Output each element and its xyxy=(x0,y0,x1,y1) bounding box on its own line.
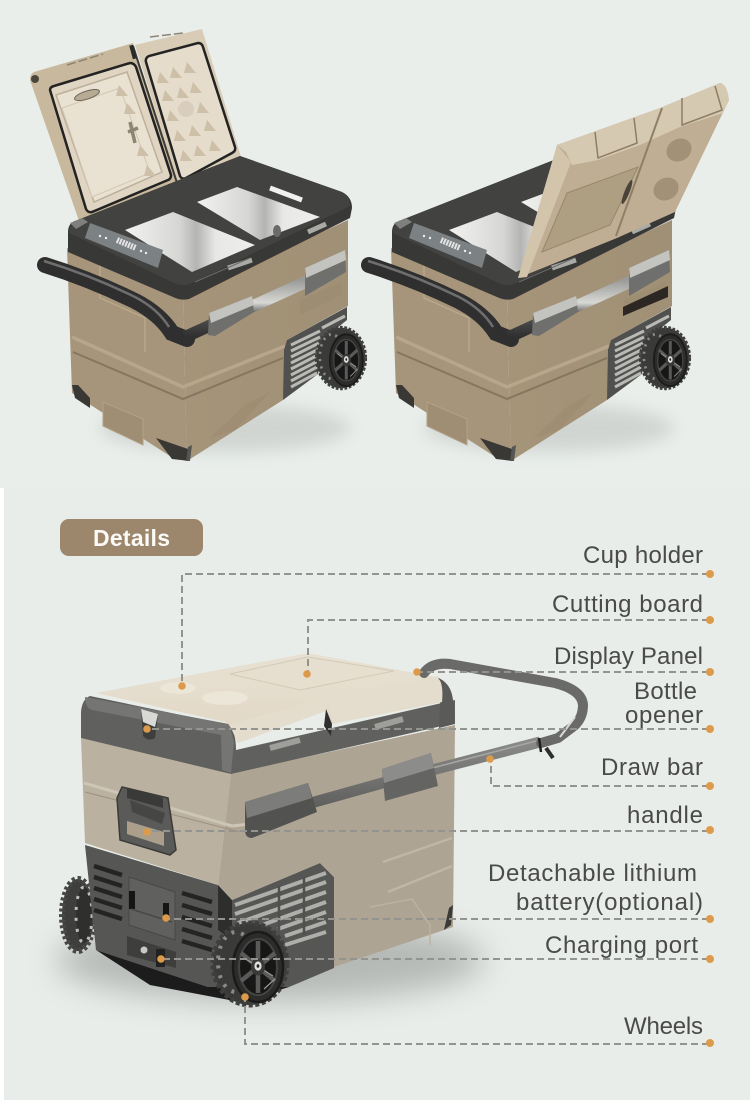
lower dark base xyxy=(85,845,334,1002)
callout: cutting board xyxy=(303,591,714,678)
callout: display panel: Display Panel xyxy=(554,643,703,670)
callout: cup holder xyxy=(178,542,714,690)
lid grips xyxy=(270,719,403,748)
side vents xyxy=(94,866,212,950)
right face xyxy=(218,725,455,967)
ground shadow xyxy=(55,918,485,1002)
side handle xyxy=(117,787,176,855)
rear wheel xyxy=(62,879,94,951)
details pill heading: Details xyxy=(93,525,170,551)
raised lid, outer side xyxy=(518,83,729,278)
product: cooler with lids half open xyxy=(368,83,729,461)
callout: detachable lithium battery: battery(optional) xyxy=(516,889,703,916)
left face xyxy=(81,738,231,885)
draw bar and brackets xyxy=(245,664,583,838)
bottle opener latch xyxy=(141,709,158,740)
right lid, interior side with ice pattern xyxy=(129,29,242,190)
callout: detachable lithium battery xyxy=(162,860,714,923)
callout: bottle opener: Bottle xyxy=(634,678,697,705)
charging ports xyxy=(127,936,176,968)
details pill heading xyxy=(60,519,203,556)
closed lids xyxy=(96,653,442,743)
callout: cutting board: Cutting board xyxy=(552,591,703,618)
callout: wheels xyxy=(241,993,714,1047)
dark band and rim xyxy=(81,696,455,774)
product: open cooler, two lids raised xyxy=(30,29,365,461)
callout: charging port xyxy=(157,932,714,963)
callout: cup holder: Cup holder xyxy=(583,542,703,569)
product: closed cooler with callout targets xyxy=(55,653,583,1005)
callout: bottle opener: opener xyxy=(625,702,703,729)
callout: bottle opener xyxy=(143,678,714,733)
background: bottom section xyxy=(0,488,750,1100)
callout: draw bar: Draw bar xyxy=(601,754,703,781)
callout: detachable lithium battery: Detachable lithium xyxy=(488,860,697,887)
left lid, interior side xyxy=(30,43,180,226)
callout: draw bar xyxy=(486,754,714,790)
callout: handle xyxy=(143,802,714,836)
callout: handle: handle xyxy=(627,802,703,829)
cooler body with handle and wheel xyxy=(44,156,365,461)
callout: display panel xyxy=(413,643,714,676)
body ribs xyxy=(84,783,250,826)
background: details panel xyxy=(4,488,750,1100)
callout: charging port: Charging port xyxy=(545,932,698,959)
background: top section xyxy=(0,0,750,488)
logo plate xyxy=(623,286,668,316)
battery compartment xyxy=(129,877,175,940)
cooler body with handle and wheel xyxy=(368,156,689,461)
grille xyxy=(235,873,326,945)
callout: wheels: Wheels xyxy=(624,1013,703,1040)
front wheel xyxy=(213,923,287,1005)
